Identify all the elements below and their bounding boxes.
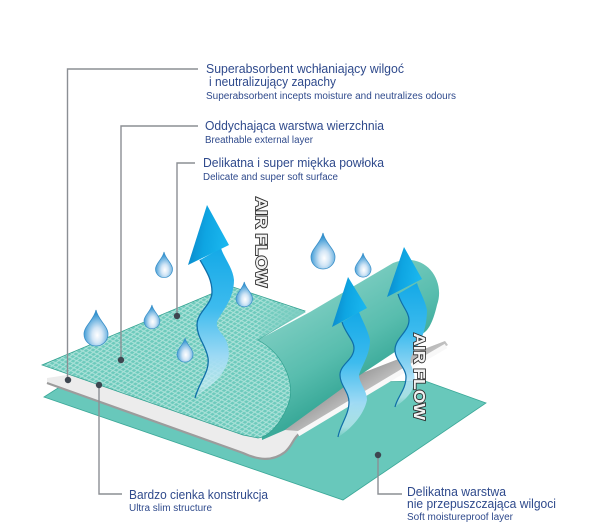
icon: water drop 5 — [236, 282, 253, 307]
text block: breathable layer: Breathable external layer — [205, 135, 314, 146]
icon: water drop 1 — [84, 310, 108, 346]
icon: water drop 6 — [311, 233, 335, 269]
text block: moistureproof: Soft moistureproof layer — [407, 512, 514, 523]
arrow: right air flow — [387, 247, 427, 407]
text block: ultra slim: Ultra slim structure — [129, 503, 212, 514]
text block: superabsorbent: Superabsorbent incepts moisture and neutralizes odours — [206, 91, 456, 102]
layer: bottom moistureproof sheet — [44, 381, 486, 500]
text block: ultra slim: Bardzo cienka konstrukcja — [129, 488, 268, 502]
layer: rolled top sheet — [258, 260, 439, 440]
text block: superabsorbent: Superabsorbent wchłaniający wilgoć — [206, 62, 404, 76]
leader dots — [65, 313, 381, 458]
text block: ultra slim — [129, 488, 268, 514]
text block: superabsorbent: i neutralizujący zapachy — [209, 75, 337, 89]
leader line: soft surface — [177, 163, 195, 316]
text block: breathable layer: Oddychająca warstwa wierzchnia — [205, 119, 384, 133]
text block: soft surface: Delicate and super soft surface — [203, 172, 338, 183]
leader line: moistureproof layer — [378, 455, 402, 494]
icon: water drop 2 — [156, 252, 173, 278]
layer: woven top surface — [42, 286, 306, 438]
arrow: middle air flow — [332, 277, 370, 437]
leader line: superabsorbent — [68, 69, 198, 380]
text block: soft surface — [203, 156, 384, 183]
icon: water drop 4 — [177, 338, 193, 362]
arrow: left air flow — [188, 205, 234, 398]
text block: moistureproof — [407, 485, 556, 523]
text block: moistureproof: Delikatna warstwa — [407, 485, 506, 499]
text block: superabsorbent — [206, 62, 456, 102]
leader line: breathable layer — [121, 126, 198, 360]
text block: soft surface: Delikatna i super miękka powłoka — [203, 156, 384, 170]
leader line: slim structure — [99, 385, 122, 494]
icon: water drop 7 — [355, 253, 371, 277]
label: air flow left: AIR FLOW — [252, 197, 269, 287]
text block: moistureproof: nie przepuszczająca wilgoci — [407, 497, 556, 511]
text block: breathable layer — [205, 119, 384, 146]
icon: water drop 3 — [144, 305, 160, 329]
label: air flow right: AIR FLOW — [410, 333, 427, 420]
layer: grey absorbent core — [47, 341, 448, 459]
